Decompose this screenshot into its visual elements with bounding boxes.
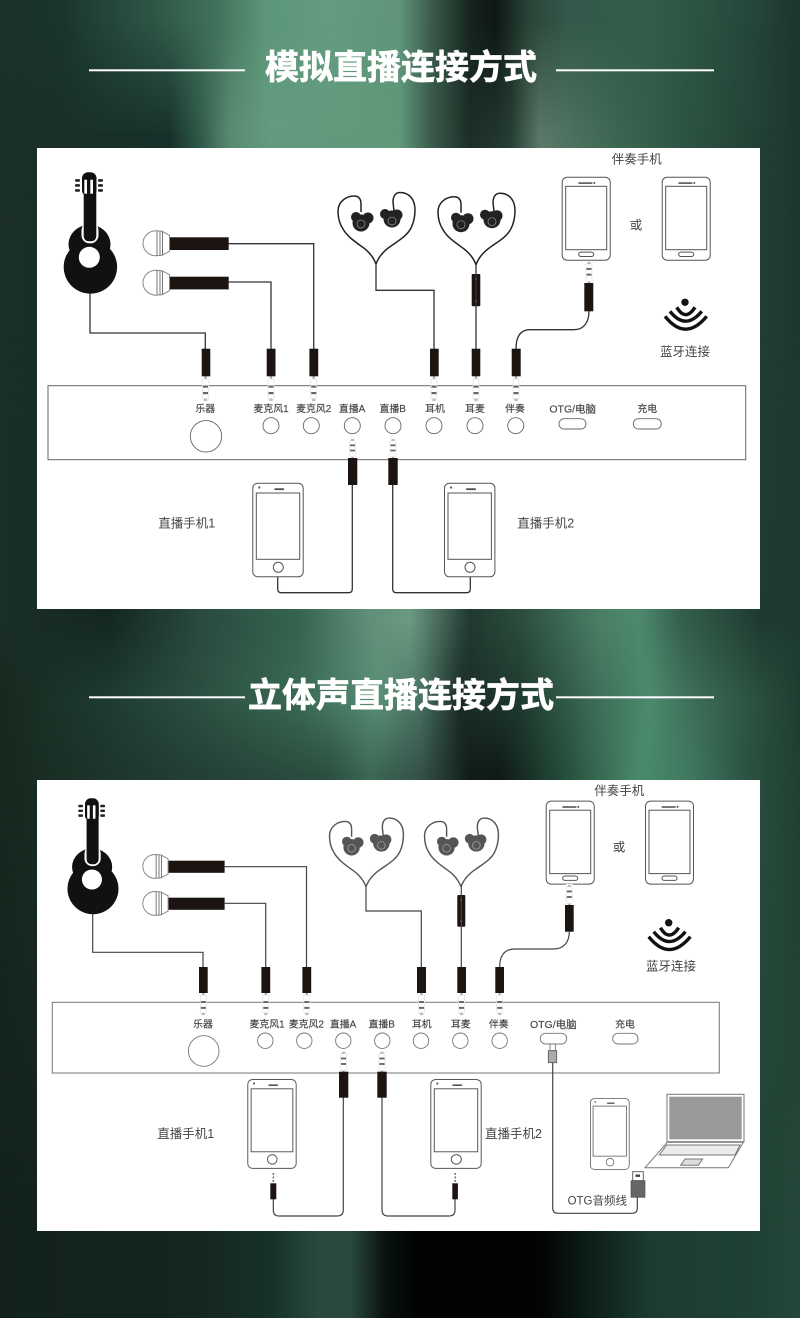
cables <box>93 867 637 1216</box>
icon: earphones <box>338 192 415 264</box>
icon: earphones <box>330 818 403 887</box>
port labels: 伴奏 <box>489 1018 509 1030</box>
icon: microphones <box>143 854 225 915</box>
port labels: 耳麦 <box>451 1018 471 1030</box>
port labels: 直播B <box>369 1018 395 1030</box>
label: bluetooth: 蓝牙连接 <box>646 959 696 974</box>
port labels <box>193 1018 635 1031</box>
title: analog live connection: 模拟直播连接方式 <box>265 49 537 87</box>
label: accompaniment phone: 伴奏手机 <box>594 784 645 798</box>
cables <box>90 244 589 593</box>
mixer box <box>48 386 746 460</box>
jacks below box for live ports <box>348 438 398 485</box>
label: or: 或 <box>630 218 643 232</box>
icon: bluetooth waves <box>665 299 707 329</box>
icon: earphones with inline mic <box>438 193 515 306</box>
port labels: 伴奏 <box>505 402 525 415</box>
icon: guitar <box>67 798 118 914</box>
accompaniment jack <box>565 884 574 932</box>
accompaniment phones <box>546 801 694 884</box>
jacks below box for live ports <box>339 1051 387 1098</box>
phone jacks <box>270 1173 458 1199</box>
port labels: 直播B <box>380 402 406 415</box>
port labels: OTG/电脑 <box>549 403 596 416</box>
live phone 2 <box>431 1079 481 1168</box>
port labels: OTG/电脑 <box>530 1018 577 1031</box>
label: live phone 2: 直播手机2 <box>517 516 574 530</box>
accompaniment jack <box>584 261 593 311</box>
panel: analog live connection <box>37 148 760 609</box>
label: or: 或 <box>613 841 626 855</box>
jacks and plugs into top ports <box>202 349 521 402</box>
label: live phone 1: 直播手机1 <box>158 516 215 530</box>
computer phone <box>590 1099 629 1169</box>
port labels: 直播A <box>339 402 366 415</box>
port labels: 麦克风2 <box>296 403 331 415</box>
port sockets <box>188 1033 638 1066</box>
jacks and plugs into top ports <box>199 967 504 1016</box>
port sockets <box>190 418 661 452</box>
port labels: 耳机 <box>425 402 445 415</box>
port labels: 充电 <box>615 1018 635 1030</box>
panel: stereo live connection <box>37 780 760 1231</box>
live phone 1 <box>253 483 303 577</box>
port labels: 乐器 <box>195 403 215 415</box>
port labels: 麦克风1 <box>249 1018 285 1030</box>
port labels: 充电 <box>637 402 657 415</box>
port labels <box>195 402 657 416</box>
label: live phone 1: 直播手机1 <box>157 1127 214 1141</box>
label: accompaniment phone: 伴奏手机 <box>612 153 662 167</box>
icon: microphones <box>143 231 229 295</box>
port labels: 耳机 <box>412 1018 432 1030</box>
accompaniment phones <box>562 177 710 260</box>
icon: guitar <box>64 172 117 294</box>
icon: laptop <box>645 1094 744 1168</box>
icon: bluetooth waves <box>649 919 690 950</box>
live phone 2 <box>444 483 495 577</box>
port labels: 直播A <box>330 1018 357 1030</box>
port labels: 麦克风2 <box>289 1018 324 1030</box>
icon: earphones with inline mic <box>425 818 498 927</box>
mixer box <box>52 1002 719 1073</box>
label: live phone 2: 直播手机2 <box>485 1127 542 1141</box>
label: OTG audio cable: OTG音频线 <box>568 1194 628 1208</box>
port labels: 乐器 <box>193 1018 213 1030</box>
icon: USB plug <box>631 1172 645 1197</box>
title: stereo live connection: 立体声直播连接方式 <box>248 677 554 715</box>
live phone 1 <box>248 1079 296 1168</box>
label: bluetooth: 蓝牙连接 <box>660 344 710 359</box>
port labels: 耳麦 <box>465 403 485 415</box>
port labels: 麦克风1 <box>253 403 289 415</box>
OTG connector <box>548 1044 557 1063</box>
